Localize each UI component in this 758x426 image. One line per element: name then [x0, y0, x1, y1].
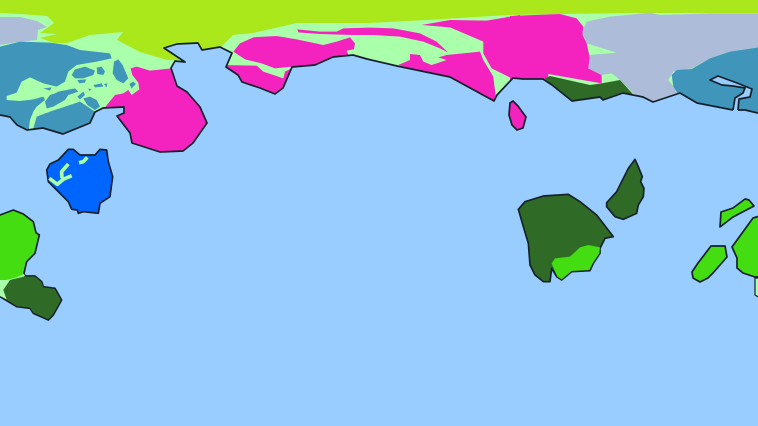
- island veins: [49, 157, 87, 184]
- island: blue: [47, 149, 113, 213]
- grey region west: [0, 17, 47, 45]
- map of land and sea: [0, 0, 758, 321]
- inlet: [710, 76, 752, 110]
- pink region India: [105, 66, 206, 152]
- teal region east: [672, 48, 758, 112]
- teal region west: [0, 42, 136, 137]
- green island: [692, 246, 727, 282]
- pink regions central: [220, 15, 520, 103]
- eastern green landmass: [732, 216, 758, 279]
- coastline: [0, 43, 758, 152]
- bright green part: [552, 245, 600, 279]
- large dark island: [518, 194, 613, 282]
- light strip: [755, 278, 758, 298]
- northern landmass: [0, 0, 758, 157]
- island: Sri Lanka: [509, 101, 526, 130]
- pink region east and dark green coast: [510, 12, 758, 112]
- light green lowlands: [0, 13, 758, 129]
- lime northern band: [0, 0, 758, 60]
- southeastern islands: [518, 159, 758, 298]
- small green island: [720, 199, 754, 227]
- grey region east: [582, 13, 758, 107]
- western landmass bright green with dark green: [0, 210, 62, 320]
- dark island: [607, 159, 644, 219]
